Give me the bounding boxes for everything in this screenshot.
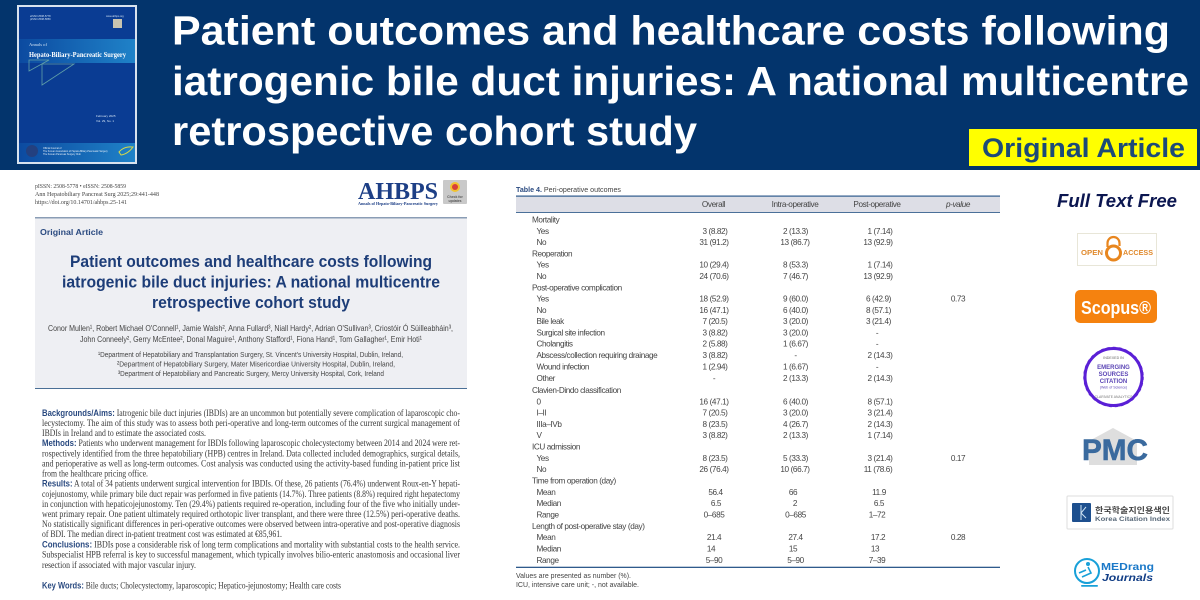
authors <box>48 323 453 344</box>
abstract: of BDI. The median direct in-patient treatment cost was estimated at €85,961. <box>42 529 282 539</box>
table rows: 0–685 <box>704 510 725 520</box>
table rows: I–II <box>536 408 546 418</box>
badge: Emerging Sources Citation: SOURCES <box>1099 372 1128 378</box>
table rows: - <box>876 362 879 372</box>
table rows: 2 (14.3) <box>867 351 893 360</box>
table rows: 5 (33.3) <box>783 454 809 463</box>
journal cover: February 2025 <box>96 114 116 118</box>
article title <box>62 253 440 312</box>
table rows: No <box>536 272 547 281</box>
journal cover: pISSN 2508-5859 <box>30 17 51 21</box>
table rows: 2 (13.3) <box>783 431 809 440</box>
table rows: 10 (66.7) <box>780 465 810 474</box>
banner title: Patient outcomes and healthcare costs following <box>172 8 1170 54</box>
table rows: 1 (7.14) <box>867 260 893 270</box>
table rows: - <box>876 328 879 338</box>
badge: Korea Citation Index <box>1067 496 1173 529</box>
abstract: IBDIs in Ireland and to estimate the associated costs. <box>42 428 206 438</box>
table rows: Yes <box>536 260 549 270</box>
citation info: https://doi.org/10.14701/ahbps.25-141 <box>35 200 127 206</box>
table rows: 3 (20.0) <box>783 317 809 326</box>
table rows: 26 (76.4) <box>699 465 729 474</box>
banner title <box>172 8 1189 154</box>
table header <box>516 196 1000 213</box>
table rows: 1–72 <box>869 510 886 520</box>
table rows: 2 (13.3) <box>783 227 809 236</box>
table rows: 6.5 <box>874 499 885 508</box>
sidebar: indexing badges <box>1057 191 1177 587</box>
table rows: Yes <box>536 227 549 236</box>
abstract: Conclusions: IBDIs pose a considerable risk of long term complications and mortality with substantial costs to the health service. <box>42 539 460 549</box>
abstract: Backgrounds/Aims: Iatrogenic bile duct injuries (IBDIs) are an uncommon but potentially severe complication of laparoscopic cho- <box>42 408 460 418</box>
abstract: No statistically significant differences in peri-operative outcomes were observed between intra-operative and post-operative diagnosis <box>42 519 460 529</box>
table rows: Length of post-operative stay (day) <box>532 522 645 531</box>
badge: MEDrang Journals: MEDrang <box>1101 561 1154 573</box>
table rows: 7–39 <box>869 556 886 565</box>
table rows: 18 (52.9) <box>699 294 729 304</box>
table rows: - <box>876 340 879 348</box>
table rows: Yes <box>536 294 549 304</box>
table rows: 6 (40.0) <box>783 398 809 406</box>
badge: open access: ACCESS <box>1123 248 1153 257</box>
article title: retrospective cohort study <box>152 294 351 312</box>
citation info: Ann Hepatobiliary Pancreat Surg 2025;29:441-448 <box>35 192 159 198</box>
table rows: 2 (14.3) <box>867 374 893 383</box>
table rows: Reoperation <box>532 250 573 258</box>
table rows: 2 (13.3) <box>783 374 809 383</box>
logo: AHBPS: AHBPS <box>358 179 438 205</box>
authors: Conor Mullen¹, Robert Michael O'Connell¹, Jamie Walsh², Anna Fullard³, Niall Hardy², Adrian O'Sullivan³, Criostóir Ó Súilleabháin³, <box>48 323 453 333</box>
table header: p-value <box>945 200 971 209</box>
table rows: 16 (47.1) <box>699 398 729 406</box>
badge: Korea Citation Index: 한국학술지인용색인 <box>1095 505 1170 515</box>
abstract <box>42 408 460 590</box>
table rows: 14 <box>707 544 716 554</box>
icon: check for updates <box>443 180 467 204</box>
table rows: 10 (29.4) <box>699 260 729 270</box>
table rows: 8 (23.5) <box>702 454 728 463</box>
table rows: IIIa–IVb <box>536 420 562 429</box>
badge: Emerging Sources Citation: (Web of Science) <box>1100 386 1127 390</box>
abstract: lecystectomy. The aim of this study was to assess both peri-operative and long-term outcomes of the current surgical management of <box>42 418 460 428</box>
journal cover: www.ahbps.org <box>106 14 124 18</box>
table: peri-operative outcomes <box>516 185 1000 589</box>
heading: Full Text Free: Full Text Free <box>1057 191 1177 211</box>
journal cover: Vol. 29, No. 1 <box>96 119 114 123</box>
banner title: retrospective cohort study <box>172 108 697 154</box>
abstract: and perioperative as well as long-term outcomes. Cost analysis was conducted using the activity-based funding in-patient price list <box>42 459 460 469</box>
table rows: 3 (8.82) <box>702 351 728 360</box>
table rows: 0.17 <box>951 454 966 463</box>
table rows: 3 (21.4) <box>867 408 893 418</box>
journal cover: The Korean Pancreas Surgery Club <box>43 153 82 156</box>
table rows: 4 (26.7) <box>783 420 809 429</box>
table rows: 11.9 <box>872 488 887 497</box>
table rows: 27.4 <box>788 533 804 542</box>
badge: open access <box>1078 234 1156 266</box>
badge: Emerging Sources Citation <box>1084 348 1143 406</box>
table rows: 1 (6.67) <box>783 362 809 372</box>
authors: John Conneely², Gerry McEntee², Donal Maguire¹, Anthony Stafford¹, Fiona Hand¹, Tom Gallagher¹, Emir Hoti¹ <box>80 334 422 344</box>
citation info: pISSN: 2508-5778 • eISSN: 2508-5859 <box>35 184 126 190</box>
badge: Scopus: Scopus® <box>1081 298 1151 318</box>
table rows: - <box>794 351 797 360</box>
table rows: Post-operative complication <box>532 284 623 292</box>
table rows: Mean <box>536 488 556 497</box>
abstract: Subspecialist HPB referral is key to successful management, which typically involves bilio-enteric anastomosis and occasional liver <box>42 550 460 560</box>
badge: Original Article <box>969 129 1197 166</box>
abstract: Results: A total of 34 patients underwent surgical intervention for IBDIs. Of these, 26 patients (76.4%) underwent Roux-en-Y hepati- <box>42 479 460 489</box>
table rows: 13 (92.9) <box>863 238 893 247</box>
badge: MEDrang Journals: Journals <box>1102 572 1153 584</box>
table header: Post-operative <box>853 200 901 209</box>
table rows: 7 (46.7) <box>783 272 809 281</box>
article first page <box>35 179 467 590</box>
table rows: 6 (42.9) <box>866 294 892 304</box>
icon: check for updates: Check for <box>447 195 463 199</box>
abstract: resection if associated with major vascular injury. <box>42 560 196 570</box>
table rows: Time from operation (day) <box>532 476 617 486</box>
journal cover: Hepato-Biliary-Pancreatic Surgery <box>29 51 126 59</box>
abstract: went primary repair. One patient ultimately required orthotopic liver transplant, and there were three (12.5%) peri-operative deaths. <box>42 509 460 519</box>
table rows <box>532 216 966 565</box>
table rows: 0–685 <box>785 510 807 520</box>
icon: check for updates: updates <box>448 199 462 203</box>
table rows: No <box>536 306 547 315</box>
table rows: 2 (14.3) <box>867 420 893 429</box>
affiliations: ³Department of Hepatobiliary and Pancreatic Surgery, Mercy University Hospital, Cork, Ireland <box>118 369 384 378</box>
badge: Korea Citation Index: Korea Citation Index <box>1095 516 1170 523</box>
table rows: 0.73 <box>951 294 966 304</box>
table rows: - <box>713 374 716 383</box>
table footnotes: ICU, intensive care unit; -, not available. <box>516 580 639 589</box>
table footnotes: Values are presented as number (%). <box>516 571 631 580</box>
table rows: Other <box>536 374 556 383</box>
badge: Original Article: Original Article <box>982 133 1185 163</box>
table header: Overall <box>702 200 726 209</box>
journal cover: The Korean Association of Hepato-Biliary-Pancreatic Surgery <box>43 150 109 153</box>
table rows: No <box>536 238 547 247</box>
badge: open access: OPEN <box>1081 248 1103 257</box>
table rows: 7 (20.5) <box>702 317 728 326</box>
table rows: 2 <box>793 499 798 508</box>
banner title: iatrogenic bile duct injuries: A national multicentre <box>172 58 1189 104</box>
table rows: 3 (20.0) <box>783 408 809 418</box>
table rows: Range <box>536 556 559 565</box>
abstract: Methods: Patients who underwent management for IBDIs following laparoscopic cholecystectomy between 2014 and 2024 were ret- <box>42 438 460 448</box>
label: Original Article: Original Article <box>40 227 103 237</box>
badge: PMC: PMC <box>1082 434 1148 467</box>
table rows: 16 (47.1) <box>699 306 729 315</box>
abstract: rospectively identified from the three hepatobiliary (HPB) centres in Ireland. Data collected included demographics, surgical details, <box>42 448 460 458</box>
article title: Patient outcomes and healthcare costs following <box>70 253 432 271</box>
table rows: 1 (7.14) <box>867 431 893 440</box>
title panel <box>35 217 467 389</box>
table rows: 0.28 <box>951 533 966 542</box>
table rows: 1 (6.67) <box>783 340 809 348</box>
table rows: 8 (53.3) <box>783 260 809 270</box>
badge: Emerging Sources Citation: CLARIVATE ANALYTICS <box>1095 395 1133 399</box>
table rows: Wound infection <box>536 362 590 372</box>
table rows: Yes <box>536 454 549 463</box>
journal cover: Annals of <box>29 42 47 47</box>
table rows: Cholangitis <box>536 340 573 348</box>
journal cover: Official Journal of <box>43 147 62 150</box>
abstract: Key Words: Bile ducts; Cholecystectomy, laparoscopic; Hepatico-jejunostomy; Health care costs <box>42 580 341 590</box>
table rows: 3 (20.0) <box>783 328 809 338</box>
table rows: 56.4 <box>708 488 724 497</box>
table rows: 1 (7.14) <box>867 227 893 236</box>
table rows: 5–90 <box>787 556 805 565</box>
table rows: 6 (40.0) <box>783 306 809 315</box>
table footnotes <box>516 571 639 589</box>
table rows: 21.4 <box>707 533 722 542</box>
table rows: 3 (8.82) <box>702 227 728 236</box>
table rows: Surgical site infection <box>536 328 606 338</box>
abstract: in conjunction with hepaticojejunostomy. Ten (29.4%) patients required re-operation, including four of the five who initially under- <box>42 499 460 509</box>
affiliations: ¹Department of Hepatobiliary and Transplantation Surgery, St. Vincent's University Hospital, Dublin, Ireland, <box>98 350 403 359</box>
table rows: 8 (23.5) <box>702 420 728 429</box>
table rows: Range <box>536 510 559 520</box>
table rows: 5–90 <box>706 556 723 565</box>
table rows: 24 (70.6) <box>699 272 729 281</box>
badge: Emerging Sources Citation: EMERGING <box>1097 365 1130 371</box>
badge: Scopus <box>1075 290 1157 323</box>
table rows: Mortality <box>532 216 561 224</box>
table rows: 13 (92.9) <box>863 272 893 281</box>
badge: MEDrang Journals <box>1075 559 1154 587</box>
table rows: Clavien-Dindo classification <box>532 386 622 395</box>
table rows: 3 (8.82) <box>702 328 728 338</box>
table rows: 2 (5.88) <box>702 340 728 348</box>
table rows: 3 (8.82) <box>702 431 728 440</box>
article title: iatrogenic bile duct injuries: A national multicentre <box>62 274 440 292</box>
table rows: 1 (2.94) <box>702 362 728 372</box>
table rows: Abscess/collection requiring drainage <box>536 351 658 360</box>
abstract: cojejunostomy, while primary bile duct repair was performed in five patients (14.7%). Three patients (8.8%) required right hepatectomy <box>42 489 460 499</box>
journal cover <box>17 5 137 164</box>
table rows: Median <box>536 544 562 554</box>
table rows: Mean <box>536 533 556 542</box>
citation info <box>35 184 159 206</box>
table rows: 8 (57.1) <box>867 398 893 406</box>
table rows: Median <box>536 499 562 508</box>
table rows: 11 (78.6) <box>864 465 893 474</box>
table rows: 0 <box>536 398 542 406</box>
table rows: 15 <box>789 544 798 554</box>
table header: Intra-operative <box>772 200 819 209</box>
table rows: 13 <box>871 544 880 554</box>
logo: AHBPS: Annals of Hepato-Biliary-Pancreatic Surgery <box>358 201 439 206</box>
table rows: 3 (21.4) <box>867 454 893 463</box>
table rows: 66 <box>789 488 798 497</box>
table rows: 7 (20.5) <box>702 408 728 418</box>
abstract: from the healthcare pricing office. <box>42 469 148 479</box>
table rows: 13 (86.7) <box>780 238 810 247</box>
table rows: V <box>536 431 542 440</box>
table rows: 8 (57.1) <box>866 306 892 315</box>
table rows: No <box>536 465 547 474</box>
affiliations: ²Department of Hepatobiliary Surgery, Mater Misericordiae University Hospital, Dublin, Ireland, <box>117 360 395 368</box>
table rows: 31 (91.2) <box>699 238 729 247</box>
table rows: 17.2 <box>871 533 886 542</box>
journal cover: eISSN 2508-5778 <box>30 14 51 18</box>
affiliations <box>98 350 403 378</box>
badge: Emerging Sources Citation: INDEXED IN <box>1103 356 1124 360</box>
table rows: ICU admission <box>532 442 581 452</box>
table caption: Table 4. Peri-operative outcomes <box>516 185 621 194</box>
badge: Emerging Sources Citation: CITATION <box>1100 379 1127 385</box>
table rows: 6.5 <box>711 499 722 508</box>
table rows: 9 (60.0) <box>783 294 809 304</box>
banner <box>0 0 1200 170</box>
table rows: Bile leak <box>536 317 565 326</box>
table rows: 3 (21.4) <box>866 317 892 326</box>
